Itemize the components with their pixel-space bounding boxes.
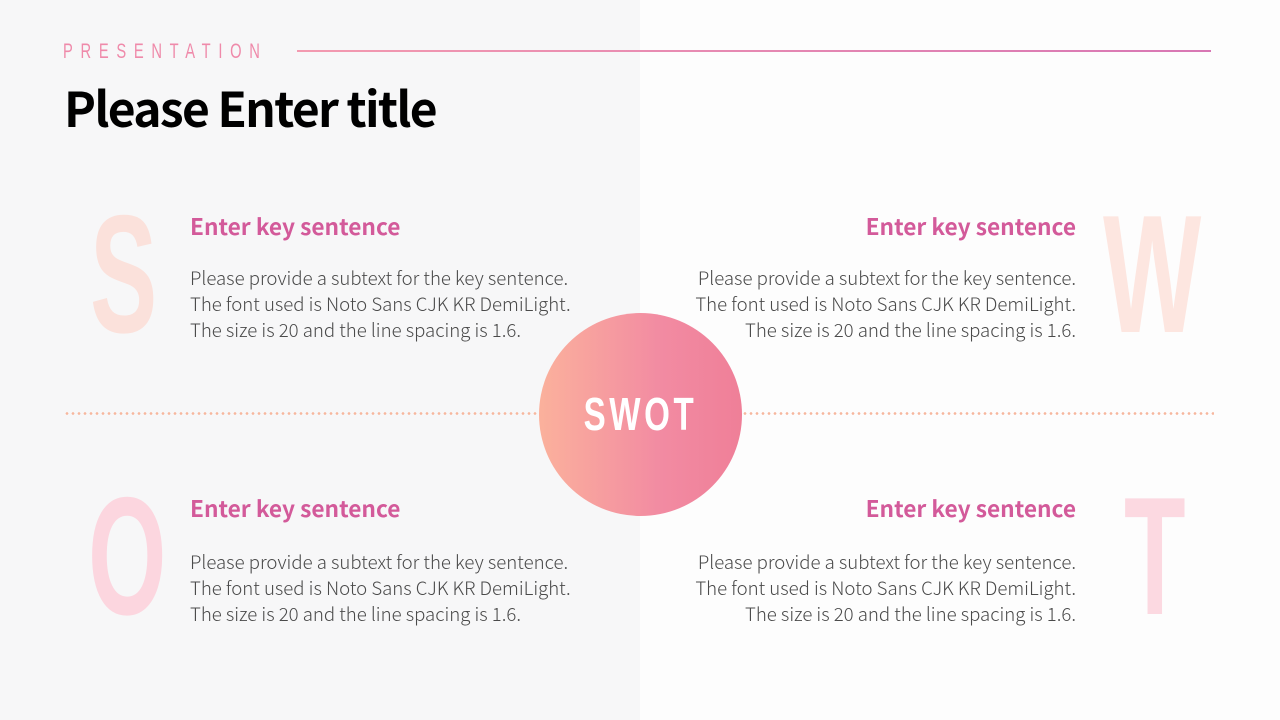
subtext: The font used is Noto Sans CJK KR DemiLight. xyxy=(190,574,571,601)
subtext: The font used is Noto Sans CJK KR DemiLight. xyxy=(190,290,571,317)
subtext xyxy=(190,548,571,627)
panel: weaknesses xyxy=(695,209,1076,343)
center circle: SWOT xyxy=(539,313,742,516)
letter T: T xyxy=(1124,462,1186,650)
subtext: Please provide a subtext for the key sentence. xyxy=(698,548,1076,575)
panel: threats xyxy=(695,491,1076,627)
subtext: The font used is Noto Sans CJK KR DemiLight. xyxy=(695,574,1076,601)
subtext: The size is 20 and the line spacing is 1.6. xyxy=(190,316,521,343)
subtext: The font used is Noto Sans CJK KR DemiLight. xyxy=(695,290,1076,317)
subtext: Please provide a subtext for the key sentence. xyxy=(190,548,568,575)
title: Please Enter title xyxy=(64,71,436,141)
key sentence: Enter key sentence xyxy=(866,491,1076,524)
center circle: SWOT: SWOT xyxy=(584,388,697,440)
letter W: W xyxy=(1103,180,1201,368)
subtext: The size is 20 and the line spacing is 1.6. xyxy=(745,316,1076,343)
subtext xyxy=(695,264,1076,343)
panel: strengths xyxy=(190,209,571,343)
key sentence: Enter key sentence xyxy=(866,209,1076,242)
panel: opportunities xyxy=(190,491,571,627)
subtext xyxy=(190,264,571,343)
key sentence: Enter key sentence xyxy=(190,491,400,524)
key sentence: Enter key sentence xyxy=(190,209,400,242)
subtext: The size is 20 and the line spacing is 1.6. xyxy=(190,600,521,627)
header line xyxy=(297,50,1211,52)
letter O: O xyxy=(88,462,166,650)
label: presentation: PRESENTATION xyxy=(63,40,268,63)
subtext: The size is 20 and the line spacing is 1.6. xyxy=(745,600,1076,627)
subtext xyxy=(695,548,1076,627)
letter S: S xyxy=(90,180,157,368)
subtext: Please provide a subtext for the key sentence. xyxy=(190,264,568,291)
subtext: Please provide a subtext for the key sentence. xyxy=(698,264,1076,291)
dotted divider xyxy=(64,412,1214,415)
